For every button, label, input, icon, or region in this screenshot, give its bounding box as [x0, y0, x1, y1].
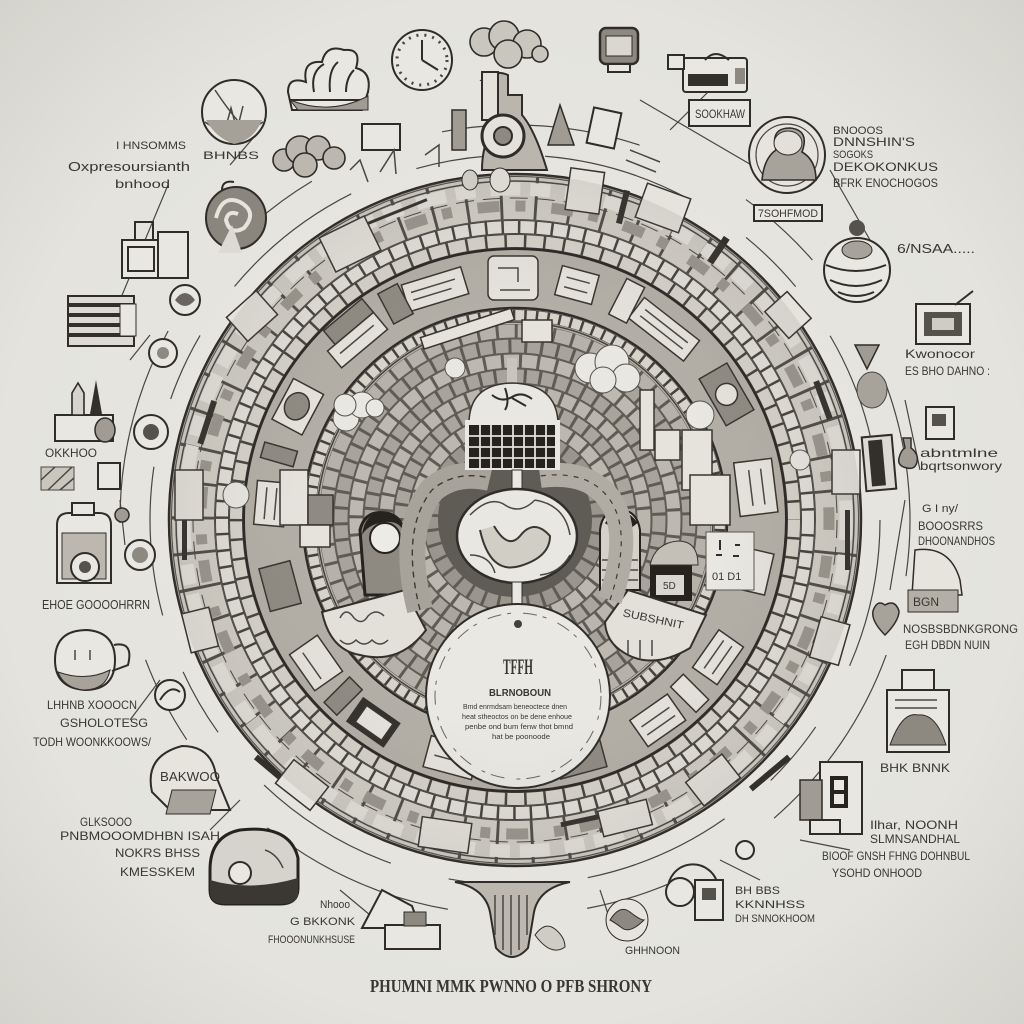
main text circle: hat be poonoode	[492, 732, 550, 741]
main text circle: TFFH	[503, 654, 533, 679]
icon: layered cake	[824, 220, 890, 302]
label box: portrait caption	[754, 205, 822, 221]
text block: top right: DEKOKONKUS	[833, 160, 938, 174]
text block: bottom left center: G BKKONK	[290, 916, 356, 928]
icon: stack of books	[68, 296, 136, 346]
icon: small round badges	[149, 285, 200, 367]
icon: small dial	[155, 680, 185, 710]
right scroll box: SUBSHNIT	[622, 607, 685, 632]
text block: bottom left center: FHOOONUNKHSUSE	[268, 934, 355, 946]
icon: envelope box	[362, 890, 440, 949]
label: globe caption: BHNBS	[203, 150, 259, 162]
wheel base disk	[169, 174, 861, 866]
icon: sail flag	[908, 549, 962, 612]
text block: left middle: TODH WOONKKOOWS/	[33, 735, 152, 749]
icon: triangle and leaf	[855, 345, 887, 408]
text block: left lower: NOKRS BHSS	[115, 846, 200, 860]
text block: right middle	[920, 446, 1002, 473]
main text circle	[426, 604, 610, 788]
text block: lower right	[822, 818, 970, 880]
icon: bag	[887, 670, 949, 752]
icon: small circles	[98, 463, 155, 570]
icon: funnel side glyph	[535, 926, 565, 950]
text: cake label: 6/NSAA.....	[897, 241, 975, 256]
left scroll box	[322, 590, 426, 657]
dark outer tile accents	[182, 190, 850, 827]
icon: jar	[600, 28, 638, 72]
icon: clouds upper left	[273, 136, 345, 177]
label box: SOOKHAW: SOOKHAW	[695, 107, 746, 121]
icon: dark bar	[862, 435, 896, 491]
brick rows	[222, 227, 808, 813]
text block: right upper	[905, 347, 990, 378]
small monitor and table: 01 D1	[712, 571, 741, 583]
icon: sail flag: BGN	[913, 595, 939, 609]
text block: right lower: BOOOSRRS	[918, 519, 983, 533]
icon: camera box	[668, 54, 747, 92]
text block: right caption: NOSBSBDNKGRONG	[903, 622, 1018, 636]
text block: right upper: Kwonocor	[905, 347, 975, 361]
label: flower caption: GHHNOON	[625, 945, 680, 957]
label: bag caption: BHK BNNK	[880, 761, 950, 775]
text block: upper left	[68, 140, 190, 191]
text block: left lower: GLKSOOO	[80, 815, 132, 829]
icon: TV	[122, 222, 188, 278]
text block: upper left: Oxpresoursianth	[68, 159, 190, 174]
panel band cards	[254, 256, 778, 782]
text block: upper left: bnhood	[115, 177, 170, 191]
icon: vase	[899, 438, 917, 468]
icon: phone block	[800, 762, 862, 834]
text block: right lower: G I ny/	[922, 503, 959, 515]
icon: portrait medallion	[749, 117, 825, 193]
text block: bottom left center: Nhooo	[320, 899, 350, 911]
icon: bottles	[55, 380, 115, 442]
brain circle	[457, 489, 577, 608]
outer tile band	[176, 181, 854, 859]
text block: lower right: BIOOF GNSH FHNG DOHNBUL	[822, 849, 970, 863]
icon: hatched box	[41, 467, 74, 490]
text block: top right: SOGOKS	[833, 149, 873, 161]
text block: lower right: YSOHD ONHOOD	[832, 866, 922, 880]
text block: lower right: Ilhar, NOONH	[870, 818, 958, 832]
icon: swirl	[206, 182, 266, 253]
text block: upper left: I HNSOMMS	[116, 140, 186, 152]
text block: right upper: ES BHO DAHNO :	[905, 364, 990, 378]
small monitor and table	[650, 532, 754, 601]
dome building	[465, 358, 560, 490]
icon: small box	[926, 407, 954, 439]
left inner dark figure	[360, 513, 405, 595]
text block: bottom right: BH BBS	[735, 885, 780, 897]
main text circle: BLRNOBOUN	[489, 688, 551, 699]
icon: flower	[606, 899, 648, 941]
text block: right caption	[903, 622, 1018, 652]
arching ribbons around brain	[412, 475, 621, 610]
light title cards on the outer band	[175, 168, 860, 853]
small monitor and table: 5D	[663, 581, 676, 592]
icon: globe lamp	[202, 80, 266, 144]
text block: top right: BFRK ENOCHOGOS	[833, 176, 938, 190]
text block: lower right: SLMNSANDHAL	[870, 832, 960, 846]
icon: cap: BAKWOO	[160, 769, 220, 784]
text block: right caption: EGH DBDN NUIN	[905, 638, 990, 652]
label box: portrait caption: 7SOHFMOD	[758, 208, 818, 220]
right scroll box	[605, 590, 706, 661]
text: jar caption: EHOE GOOOOHRRN	[42, 597, 150, 612]
icon: dial left	[134, 415, 168, 449]
text block: left lower	[60, 815, 220, 879]
label: OKKHOO: OKKHOO	[45, 446, 97, 460]
icon: mug	[55, 630, 129, 690]
icon: cap	[151, 746, 230, 814]
text block: left lower: KMESSKEM	[120, 865, 195, 879]
central wheel diagram	[169, 168, 861, 866]
cobblestone field	[319, 324, 711, 716]
icon: heart	[873, 603, 899, 635]
grid windows	[469, 425, 555, 468]
main text circle: penbe ond bum fenw thot bmnd	[465, 722, 573, 731]
text block: bottom left center	[268, 899, 356, 946]
text block: top right: DNNSHIN'S	[833, 135, 915, 149]
text block: left middle	[33, 698, 152, 749]
text block: bottom right: KKNNHSS	[735, 899, 805, 911]
text block: left middle: GSHOLOTESG	[60, 716, 148, 730]
ring edge shading	[169, 174, 861, 866]
icon: cloud hand	[288, 48, 369, 110]
icon: top tree and tower	[462, 21, 660, 192]
icon: funnel base	[455, 882, 570, 957]
icon: headphone device	[666, 841, 754, 920]
bottom title: PHUMNI MMK PWNNO O PFB SHRONY	[370, 976, 652, 996]
text block: right lower: DHOONANDHOS	[918, 534, 995, 548]
icon: monitor	[916, 291, 973, 344]
text block: bottom right	[735, 885, 815, 925]
text block: left lower: PNBMOOOMDHBN ISAH	[60, 829, 220, 843]
clouds inside the ring	[223, 345, 810, 508]
right inner figure	[600, 510, 640, 590]
panel band base	[275, 280, 755, 760]
main text circle: heat stheoctos on be dene enhoue	[462, 712, 572, 721]
text block: left middle: LHHNB XOOOCN	[47, 698, 137, 712]
icon: clock	[392, 30, 452, 90]
text block: bottom right: DH SNNOKHOOM	[735, 913, 815, 925]
text block: top right	[833, 125, 938, 190]
main text circle: Bmd enrmdsam beneoctece dnen	[463, 702, 567, 711]
text block: top right: BNOOOS	[833, 125, 883, 137]
icon: small document cluster	[350, 110, 466, 182]
inner rim	[303, 308, 727, 732]
label box: SOOKHAW	[689, 100, 750, 126]
text block: right lower	[918, 503, 995, 548]
side documents column	[280, 308, 730, 547]
text block: right middle: bqrtsonwory	[920, 459, 1002, 473]
icon: jar with lens	[57, 503, 111, 583]
text block: right middle: abntmlne	[920, 446, 998, 460]
icon: rounded speaker	[210, 829, 298, 904]
